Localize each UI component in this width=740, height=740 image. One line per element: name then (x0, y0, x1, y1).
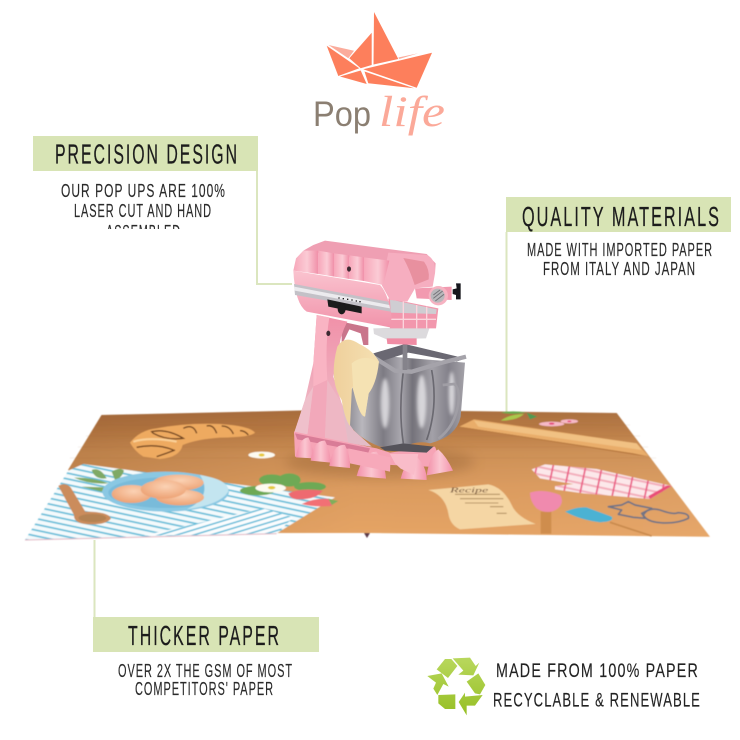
logo boat icon (327, 12, 432, 88)
cloth hem (25, 534, 277, 540)
pop up stand mixer (293, 241, 466, 480)
leaves (74, 469, 132, 492)
rolled paper fold (459, 419, 648, 457)
logo wordmark Pop: Pop (313, 95, 371, 134)
recipe sheet (428, 484, 536, 529)
bowl highlights (381, 372, 455, 428)
strawberry garnish (240, 473, 338, 506)
heading band (33, 136, 258, 171)
body text (527, 239, 713, 279)
board surface (68, 410, 710, 537)
neck shadow (342, 322, 368, 345)
cookie cutters (608, 502, 689, 523)
column folds (294, 380, 372, 447)
bowl handle (438, 384, 459, 439)
panel: thicker paper (93, 617, 319, 699)
left half props (25, 424, 338, 540)
leader line: quality materials (506, 232, 508, 412)
dough (334, 340, 379, 426)
panel: precision design (33, 136, 258, 229)
leader line: precision design (257, 171, 292, 284)
striped cloth (25, 464, 335, 540)
wooden spoon (58, 484, 111, 524)
buns (112, 475, 204, 505)
heading: THICKER PAPER (128, 620, 281, 651)
head front slats (293, 251, 389, 285)
bowl (348, 344, 466, 453)
pink spatula (530, 491, 562, 534)
blue plate (102, 472, 229, 512)
rear head layers (388, 298, 438, 328)
panel: quality materials (506, 197, 731, 279)
leaf sprig (501, 411, 537, 421)
silver band (294, 284, 391, 312)
mixer cast shadow (285, 446, 475, 478)
logo wordmark life: life (379, 89, 445, 136)
silver lower head ring (373, 327, 430, 339)
column rivet (326, 331, 330, 336)
pop up card: wooden board (25, 410, 710, 540)
white flower (248, 452, 275, 458)
body text: OUR POP UPS ARE 100% (61, 180, 226, 201)
body text: OVER 2X THE GSM OF MOST (118, 660, 293, 681)
base (294, 432, 453, 480)
speed lever (327, 297, 362, 314)
head right shoulder (382, 253, 435, 302)
right half props (428, 411, 689, 536)
logo (313, 12, 445, 136)
heading band (506, 197, 731, 232)
leader line: thicker paper (94, 540, 96, 617)
centre crease mark (364, 533, 370, 538)
heading band (93, 617, 319, 652)
pink collar (387, 338, 417, 345)
body text (118, 660, 293, 699)
body text: ASSEMBLED (106, 221, 181, 242)
column (294, 315, 372, 447)
attachment hub (415, 283, 461, 305)
icon: recycling arrows (427, 658, 485, 715)
recycling statement (493, 661, 701, 712)
head rivet (347, 266, 351, 272)
oven mitt (532, 464, 672, 499)
head back slats (303, 241, 436, 273)
blue spatula (565, 507, 652, 536)
body text: COMPETITORS' PAPER (135, 678, 274, 699)
croissant (130, 424, 255, 459)
heading: PRECISION DESIGN (55, 138, 239, 170)
head front panel (293, 271, 392, 327)
body text: LASER CUT AND HAND (74, 200, 212, 221)
recipe sheet: Recipe (448, 486, 490, 495)
pink blossoms (539, 419, 578, 426)
body text (62, 184, 224, 229)
